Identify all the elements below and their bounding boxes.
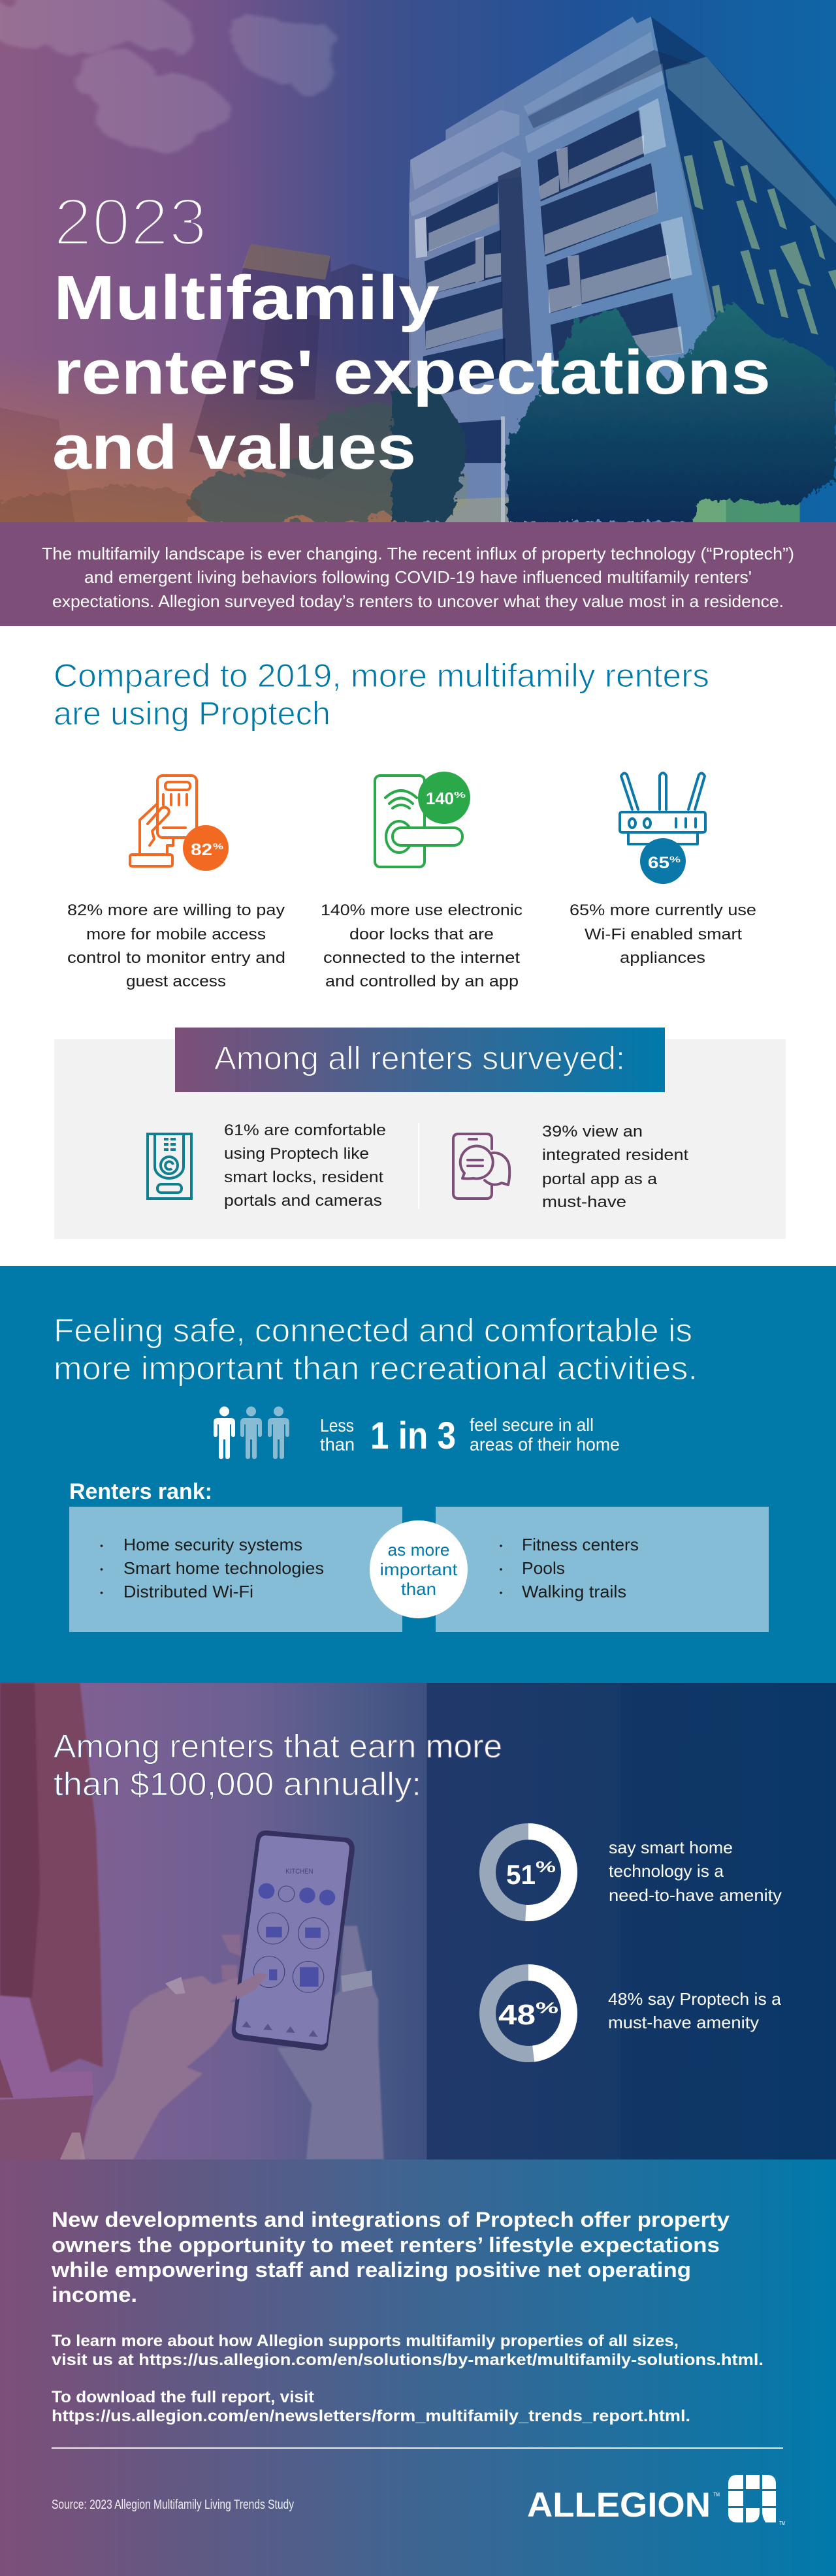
stat: less than 1 in 3: areas of their home: [470, 1434, 620, 1454]
icon: router 65%: %: [669, 855, 681, 864]
chart: 51% donut: %: [536, 1859, 556, 1876]
links: https://us.allegion.com/en/newsletters/form_multifamily_trends_report.html.: [52, 2407, 690, 2425]
panel: Proptech comparison: [0, 626, 836, 1266]
caption: 82%: control to monitor entry and: [67, 949, 285, 967]
logo: Allegion: [527, 2475, 785, 2526]
callout: as more important than: [370, 1520, 468, 1618]
logo: Allegion: TM: [713, 2492, 720, 2498]
heading: feeling safe: more important than recreational activities.: [54, 1350, 698, 1387]
caption: 65%: [570, 902, 756, 967]
text: 51% description: say smart home: [609, 1838, 733, 1857]
panel: intro band: [0, 522, 836, 626]
closing statement: New developments and integrations of Proptech offer property: [52, 2208, 730, 2231]
links: To learn more about how Allegion supports multifamily properties of all sizes,: [52, 2332, 679, 2350]
icon: phone in hand 82%: %: [213, 841, 224, 851]
callout: as more important than: as more: [388, 1540, 449, 1560]
banner: among all renters surveyed: Among all renters surveyed:: [214, 1040, 625, 1076]
icon: smart lock 140%: %: [454, 790, 466, 800]
caption: 140%: [321, 902, 522, 990]
chart: 48% donut: 48: [498, 1999, 536, 2031]
panel: less important list: Fitness centers: [522, 1535, 639, 1554]
title: and values: [52, 413, 416, 482]
panel: footer: [0, 2160, 836, 2576]
right face: [651, 17, 836, 383]
text: 48% description: must-have amenity: [608, 2013, 759, 2032]
stat: less than 1 in 3: [320, 1415, 620, 1457]
title: Multifamily: [54, 263, 440, 333]
stat: less than 1 in 3: feel secure in all: [470, 1415, 594, 1435]
panel: more important list: Distributed Wi-Fi: [123, 1582, 253, 1601]
text: 51% description: [609, 1838, 782, 1905]
heading: among high earners: [54, 1728, 502, 1802]
icon: router 65%: [620, 773, 705, 884]
text: 48% description: 48% say Proptech is a: [608, 1989, 782, 2009]
text: 39%: integrated resident: [542, 1146, 688, 1164]
text: 39%: [542, 1123, 688, 1211]
caption: 140%: door locks that are: [349, 926, 494, 943]
hero photo: sky, clouds and apartment buildings: [0, 0, 836, 529]
text: 61%: portals and cameras: [224, 1192, 382, 1210]
closing statement: while empowering staff and realizing positive net operating: [51, 2258, 691, 2282]
text: 51% description: need-to-have amenity: [609, 1885, 782, 1905]
caption: 65%: Wi-Fi enabled smart: [585, 926, 742, 943]
panel: less important list: [436, 1507, 769, 1632]
icon: router 65%: 65: [648, 854, 669, 872]
icon: phone in hand 82%: [130, 776, 229, 871]
heading: among high earners: than $100,000 annually:: [54, 1766, 421, 1802]
closing statement: [51, 2208, 730, 2306]
photo: hands holding smartphone: [0, 1683, 835, 2160]
photo: hands holding smartphone: KITCHEN: [285, 1867, 313, 1876]
panel: among all renters: [54, 1028, 786, 1239]
heading: among high earners: Among renters that earn more: [54, 1728, 502, 1765]
closing statement: owners the opportunity to meet renters’ lifestyle expectations: [52, 2233, 720, 2257]
heading: feeling safe: Feeling safe, connected and comfortable is: [54, 1312, 692, 1349]
panel: more important list: Smart home technologies: [123, 1558, 324, 1578]
chart: 48% donut: [487, 1973, 570, 2054]
icon: phone in hand 82%: 82: [191, 841, 212, 859]
text: 51% description: technology is a: [609, 1861, 724, 1881]
logo: Allegion: TM: [779, 2521, 785, 2526]
heading: renters rank: Renters rank:: [69, 1479, 212, 1504]
text: 39%: must-have: [542, 1193, 626, 1211]
heading: feeling safe: [54, 1312, 698, 1387]
text: 39%: 39% view an: [542, 1123, 643, 1140]
chart: 48% donut: %: [536, 2000, 558, 2017]
text: 48% description: [608, 1989, 782, 2032]
caption: 82%: 82% more are willing to pay: [67, 902, 285, 919]
panel: less important list: Walking trails: [522, 1582, 626, 1601]
links: To download the full report, visit: [52, 2388, 315, 2406]
caption: 65%: 65% more currently use: [570, 902, 756, 919]
chart: 51% donut: 51: [506, 1859, 536, 1890]
icon: smart lock 140%: 140: [426, 789, 454, 808]
caption: 140%: connected to the internet: [323, 949, 520, 967]
caption: 82%: guest access: [126, 973, 226, 990]
stat: less than 1 in 3: Less: [320, 1415, 354, 1436]
text: 61%: smart locks, resident: [224, 1169, 383, 1186]
panel: hero: [0, 0, 836, 529]
title: [52, 185, 771, 482]
text: 61%: 61% are comfortable: [224, 1122, 386, 1139]
source note: Source: 2023 Allegion Multifamily Living Trends Study: [52, 2498, 294, 2512]
icon: fingerprint reader: [148, 1134, 191, 1199]
text: 39%: portal app as a: [542, 1170, 658, 1188]
heading: compared to 2019: are using Proptech: [54, 695, 330, 732]
front face: [409, 17, 726, 522]
caption: 140%: 140% more use electronic: [321, 902, 522, 919]
caption: 82%: [67, 902, 285, 990]
heading: compared to 2019: [54, 657, 709, 732]
callout: as more important than: important: [380, 1560, 458, 1579]
title: renters' expectations: [54, 338, 771, 407]
caption: 140%: and controlled by an app: [325, 973, 519, 990]
icon: smart lock 140%: [375, 772, 470, 867]
intro text: The multifamily landscape is ever changing. The recent influx of property technology (“Proptech”): [42, 544, 794, 563]
links: visit us at https://us.allegion.com/en/solutions/by-market/multifamily-solutions.html.: [52, 2351, 764, 2369]
text: 61%: using Proptech like: [224, 1145, 369, 1163]
trees: [392, 300, 836, 522]
panel: less important list: Pools: [522, 1558, 565, 1578]
closing statement: income.: [52, 2283, 137, 2306]
links: [52, 2332, 764, 2425]
logo: Allegion: ALLEGION: [527, 2486, 711, 2524]
chart: 51% donut: [487, 1832, 570, 1913]
icon: three people, one highlighted: [214, 1406, 289, 1459]
intro text: and emergent living behaviors following COVID-19 have influenced multifamily renters': [84, 567, 752, 587]
intro text: expectations. Allegion surveyed today’s renters to uncover what they value most in a residence.: [52, 591, 784, 611]
text: 61%: [224, 1122, 386, 1210]
stat: less than 1 in 3: 1 in 3: [370, 1415, 456, 1457]
intro text: [42, 544, 794, 611]
panel: renters earning over $100,000: [0, 1683, 836, 2160]
callout: as more important than: than: [401, 1579, 436, 1599]
panel: more important list: Home security systems: [123, 1535, 302, 1554]
banner: among all renters surveyed: [175, 1028, 665, 1092]
heading: compared to 2019: Compared to 2019, more multifamily renters: [54, 657, 709, 694]
panel: safe and connected: [0, 1266, 836, 1683]
title: 2023: [54, 185, 207, 259]
stat: less than 1 in 3: than: [320, 1434, 355, 1454]
icon: phone with chat bubbles: [453, 1134, 509, 1199]
panel: more important list: [69, 1507, 402, 1632]
caption: 65%: appliances: [620, 949, 705, 967]
caption: 82%: more for mobile access: [86, 926, 266, 943]
